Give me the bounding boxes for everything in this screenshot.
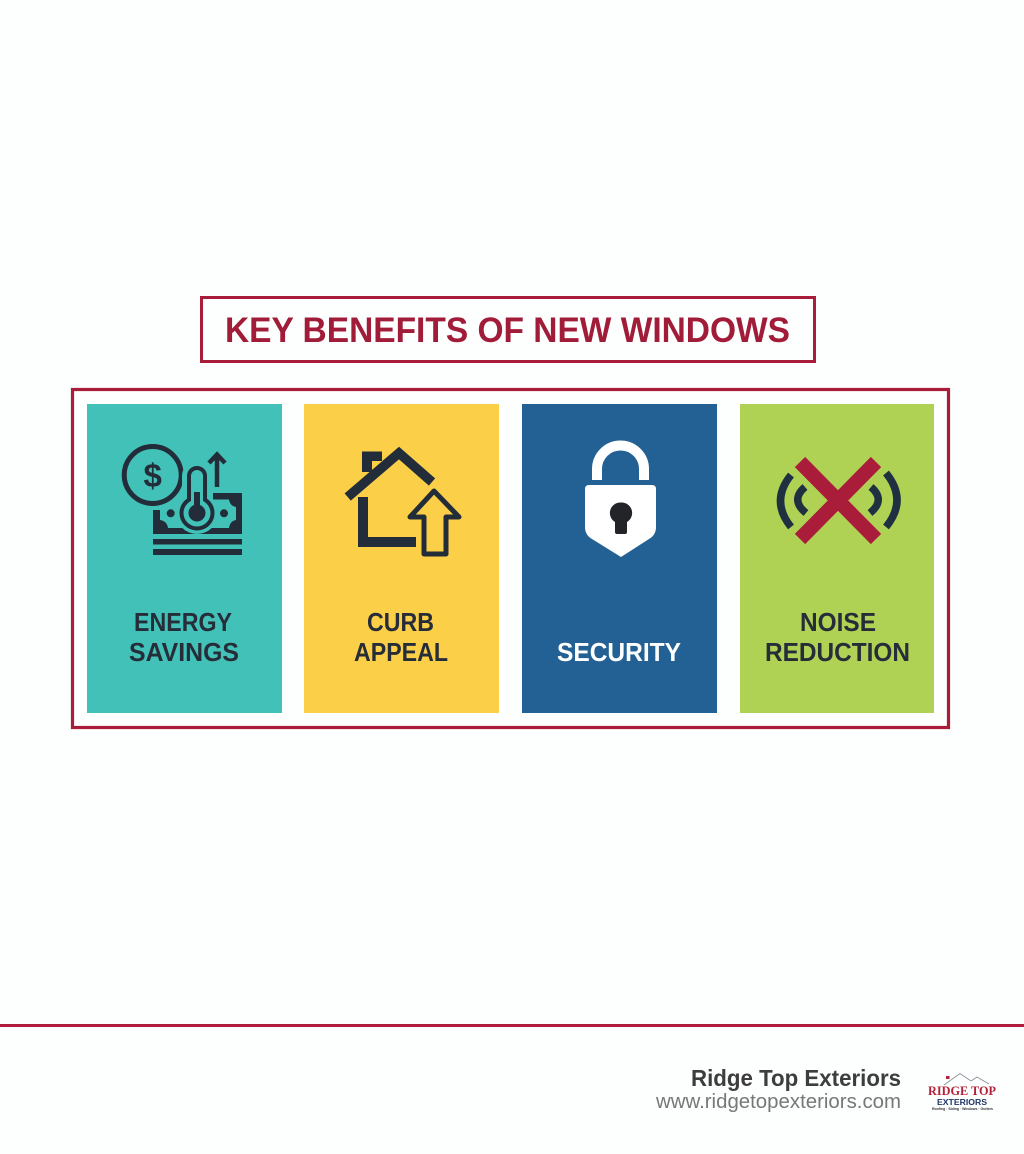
title box [202,298,814,362]
roof [348,453,432,497]
label: curb appeal [354,607,448,667]
label: energy savings: ENERGY [134,607,232,637]
thermometer [187,466,207,500]
footer company name: Ridge Top Exteriors [691,1065,901,1091]
label: security: SECURITY [557,637,681,667]
up arrow outline [410,491,459,554]
icon: padlock [585,446,656,557]
card background: yellow [304,404,499,713]
up arrow [209,454,225,487]
label: noise reduction: REDUCTION [765,637,910,667]
card background: green [740,404,934,713]
logo wordmark: RIDGE TOP [928,1083,996,1098]
sound waves [780,473,897,527]
card background: teal [87,404,282,713]
icon: house with up arrow [348,452,459,554]
chimney [362,452,382,472]
lock body [585,485,656,557]
logo: Ridge Top Exteriors [928,1074,996,1111]
house wall [363,497,416,542]
label: noise reduction: NOISE [800,607,876,637]
shackle [597,446,644,480]
label: energy savings [129,607,239,667]
coin [124,446,181,504]
benefits frame [72,390,948,728]
logo roof [944,1074,989,1085]
panel: noise reduction [740,404,934,713]
label: energy savings: SAVINGS [129,637,239,667]
panel: curb appeal [304,404,499,713]
footer divider [0,1024,1024,1027]
logo tagline: Roofing · Siding · Windows · Gutters [932,1107,993,1111]
icon: money, thermometer and coin: $ [144,457,162,494]
panel: security [522,404,717,713]
banknote [153,493,242,534]
icon: sound waves crossed out [780,462,897,539]
label: curb appeal: CURB [367,607,434,637]
red cross [800,462,876,539]
panel: energy savings [87,404,282,713]
logo subtitle: EXTERIORS [937,1098,988,1107]
icon: money, thermometer and coin [124,446,242,555]
label: curb appeal: APPEAL [354,637,448,667]
title: KEY BENEFITS OF NEW WINDOWS [225,311,790,350]
card background: blue [522,404,717,713]
keyhole [610,502,632,534]
label: noise reduction [765,607,910,667]
footer website: www.ridgetopexteriors.com [655,1091,901,1113]
bars under banknote [153,539,242,544]
